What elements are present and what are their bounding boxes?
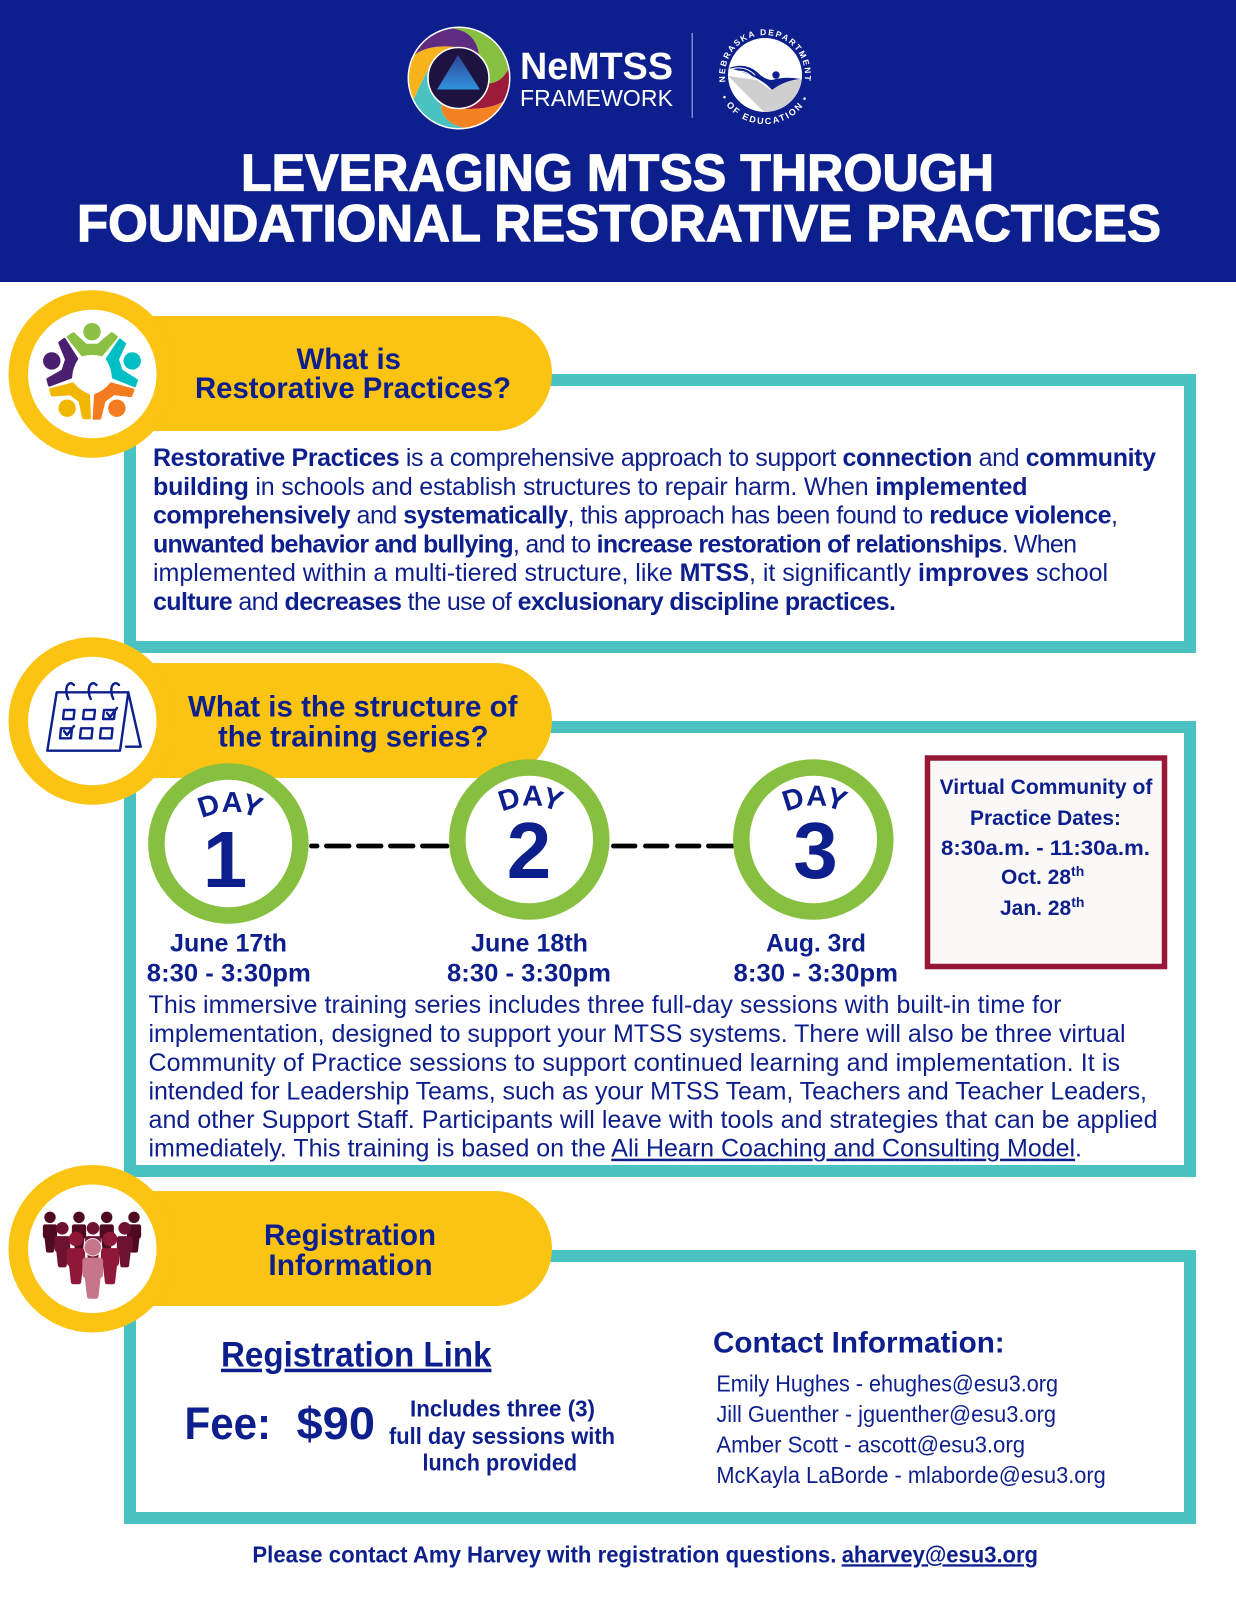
callout: virtual community of practice dates [928,758,1164,966]
contact information: Contact Information: [713,1327,1005,1360]
pill heading: the training series? [218,721,488,754]
icon: calendar [18,647,166,795]
text block: series description: intended for Leadership Teams, such as your MTSS Team, Teachers and Teacher Leaders, [148,1078,1147,1106]
contact information [713,1327,1106,1488]
day 2 badge [447,759,611,988]
callout: virtual community of practice dates: th [1071,894,1084,910]
fee: $90 [296,1398,375,1449]
day 2 badge: June 18th [471,930,588,958]
text block: series description: and other Support Staff. Participants will leave with tools and strategies that can be applied [148,1106,1158,1134]
text block: definition: Restorative Practices is a comprehensive approach to support connection and community [153,444,1156,472]
callout: virtual community of practice dates: Oct. 28 [1001,866,1071,889]
header banner [0,0,1236,282]
text block: series description: This immersive training series includes three full-day sessions with built-in time for [148,991,1062,1019]
day 3 badge: DAY [782,786,848,811]
text block: definition: implemented within a multi-tiered structure, like MTSS, it significantly improves school [153,559,1108,587]
day 2 badge: 8:30 - 3:30pm [447,960,611,988]
panel: structure of the training series [8,637,1196,1177]
pill heading: Restorative Practices? [195,372,511,405]
NeMTSS logo: FRAMEWORK [520,85,674,111]
Nebraska Department of Education seal: NEBRASKA DEPARTMENT [719,29,811,82]
day 3 badge [733,759,898,988]
day 1 badge: 1 [203,815,247,904]
footer contact line: aharvey@esu3.org [842,1541,1038,1567]
text block: definition: comprehensively and systematically, this approach has been found to reduce violence, [153,502,1118,530]
callout: virtual community of practice dates: th [1071,863,1084,879]
day 3 badge: Aug. 3rd [766,930,866,958]
pill heading: What is the structure of [188,691,518,724]
day 2 badge: DAY [498,786,564,811]
fee: Fee: [184,1398,271,1449]
timeline connector dashes [312,844,733,848]
Nebraska Department of Education seal: • OF EDUCATION • [723,96,806,124]
callout: virtual community of practice dates: Virtual Community of [940,776,1153,799]
pill heading [92,1191,552,1306]
fee note: lunch provided [422,1450,577,1476]
fee note [389,1396,615,1476]
icon: people circle [18,300,166,448]
day 2 badge: 2 [507,806,551,895]
pill heading: Information [268,1249,433,1282]
title [77,145,1161,253]
registration link: Registration Link [221,1336,492,1375]
title: FOUNDATIONAL RESTORATIVE PRACTICES [77,195,1161,253]
day 1 badge: DAY [197,792,264,818]
NeMTSS logo [408,26,674,130]
Nebraska Department of Education seal [719,29,811,124]
contact information: McKayla LaBorde - mlaborde@esu3.org [716,1462,1106,1488]
text block: series description: immediately. This training is based on the Ali Hearn Coaching and Consulting Model. [148,1135,1082,1163]
day 1 badge [147,763,311,988]
panel: what is restorative practices [18,300,1190,647]
pill heading: Registration [264,1219,436,1252]
day 3 badge: 3 [793,806,838,895]
text block: definition: unwanted behavior and bullying, and to increase restoration of relationships. When [153,530,1077,558]
fee [184,1398,375,1449]
day 1 badge: June 17th [170,930,287,958]
callout: virtual community of practice dates: Practice Dates: [970,807,1121,830]
day 3 badge: 8:30 - 3:30pm [734,960,898,988]
callout: virtual community of practice dates: Jan. 28 [1000,897,1071,920]
pill heading: What is [296,343,401,376]
contact information: Emily Hughes - ehughes@esu3.org [716,1371,1058,1397]
text block: definition: culture and decreases the use of exclusionary discipline practices. [153,588,896,616]
text block: definition: building in schools and establish structures to repair harm. When implemented [153,473,1028,501]
text block: definition [153,444,1156,616]
day 1 badge: 8:30 - 3:30pm [147,960,311,988]
text block: series description: Community of Practice sessions to support continued learning and implementation. It is [148,1049,1120,1077]
fee note: Includes three (3) [410,1396,595,1422]
title: LEVERAGING MTSS THROUGH [241,145,994,203]
pill heading [92,316,552,431]
footer contact line: Please contact Amy Harvey with registration questions. [252,1541,836,1567]
NeMTSS logo: NeMTSS [520,46,673,88]
callout: virtual community of practice dates: 8:30a.m. - 11:30a.m. [941,837,1150,860]
pill heading [92,663,552,778]
fee note: full day sessions with [389,1423,615,1449]
icon: group of people [18,1175,166,1323]
panel: registration information [18,1175,1190,1518]
contact information: Amber Scott - ascott@esu3.org [716,1432,1025,1458]
text block: series description: implementation, designed to support your MTSS systems. There will also be three virtual [148,1020,1126,1048]
text block: series description [148,991,1158,1163]
contact information: Jill Guenther - jguenther@esu3.org [716,1401,1056,1427]
